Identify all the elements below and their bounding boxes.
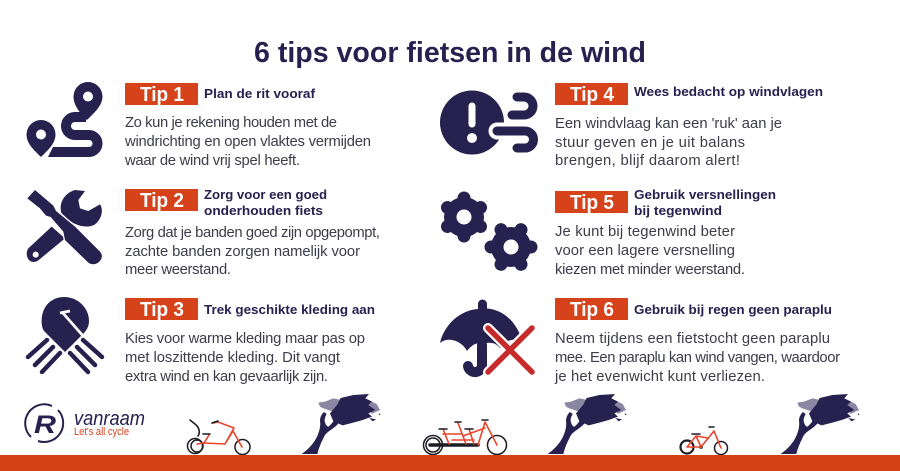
icon: wrench and screwdriver [27, 190, 102, 264]
badge: Tip 2 [125, 189, 198, 212]
text: tip 4: brengen, blijf daarom alert! [555, 153, 740, 169]
panel: tip 1 [26, 82, 371, 169]
panel: tip 3 [28, 297, 375, 385]
badge: Tip 2: Tip 2 [140, 190, 184, 212]
icon: warning and wind [440, 90, 533, 154]
illustration: windblown tree 2 [548, 394, 627, 454]
panel: tip 2 [27, 187, 380, 278]
text: tip 1: windrichting en open vlaktes vermijden [124, 134, 371, 150]
logo: van Raam: R [34, 411, 56, 439]
heading: tip 2 [204, 187, 327, 218]
heading: tip 2: onderhouden fiets [204, 203, 323, 218]
text: tip 1 [124, 115, 371, 169]
badge: Tip 3: Tip 3 [140, 299, 184, 321]
heading: tip 1: Plan de rit vooraf [204, 86, 316, 101]
text: tip 3: extra wind en kan gevaarlijk zijn. [125, 369, 328, 385]
icon: gears [444, 197, 531, 267]
text: tip 3 [125, 331, 365, 385]
icon: route with map pins [26, 82, 102, 157]
heading: tip 3: Trek geschikte kleding aan [204, 302, 375, 317]
logo: van Raam [25, 404, 145, 442]
logo: van Raam: Let's all cycle [74, 426, 129, 438]
heading: tip 5 [634, 187, 776, 218]
text: tip 6: mee. Een paraplu kan wind vangen, waardoor [555, 350, 840, 366]
title: 6 tips voor fietsen in de wind [254, 37, 646, 69]
badge: Tip 5: Tip 5 [570, 192, 614, 214]
badge: Tip 6 [555, 298, 628, 321]
badge: Tip 4 [555, 83, 628, 106]
text: tip 6 [554, 331, 840, 385]
icon: umbrella crossed out [440, 300, 532, 372]
text: tip 6: Neem tijdens een fietstocht geen paraplu [555, 331, 830, 347]
text: tip 4: stuur geven en je uit balans [555, 135, 745, 151]
text: tip 5: kiezen met minder weerstand. [555, 262, 745, 278]
ground bar [0, 455, 900, 471]
logo: van Raam: vanraam [74, 408, 145, 430]
heading: tip 5: Gebruik versnellingen [634, 187, 776, 202]
text: tip 1: waar de wind vrij spel heeft. [124, 153, 300, 169]
illustration: windblown tree 3 [781, 394, 860, 454]
heading: tip 2: Zorg voor een goed [204, 187, 327, 202]
illustration: recumbent trike [188, 420, 250, 454]
heading: tip 5: bij tegenwind [634, 203, 722, 218]
badge: Tip 1: Tip 1 [140, 84, 184, 106]
text: tip 2: Zorg dat je banden goed zijn opgepompt, [125, 225, 380, 241]
text: tip 5 [555, 224, 745, 278]
text: tip 3: Kies voor warme kleding maar pas op [125, 331, 365, 347]
text: tip 1: Zo kun je rekening houden met de [125, 115, 337, 131]
text: tip 2: meer weerstand. [125, 262, 231, 278]
panel: tip 4 [440, 83, 823, 169]
heading: tip 6: Gebruik bij regen geen paraplu [634, 302, 832, 317]
text: tip 6: je het evenwicht kunt verliezen. [554, 369, 765, 385]
panel: tip 5 [444, 187, 776, 278]
badge: Tip 1 [125, 83, 198, 106]
illustration: windblown tree 1 [302, 394, 381, 454]
illustration: small bicycle [680, 427, 728, 454]
icon: scarf [28, 297, 102, 372]
illustration: tandem bicycle [424, 420, 506, 454]
panel: tip 6 [440, 298, 840, 385]
badge: Tip 5 [555, 191, 628, 214]
heading: tip 4: Wees bedacht op windvlagen [634, 84, 823, 99]
text: tip 3: met loszittende kleding. Dit vangt [125, 350, 340, 366]
badge: Tip 6: Tip 6 [570, 299, 614, 321]
text: tip 5: Je kunt bij tegenwind beter [555, 224, 735, 240]
text: tip 4: Een windvlaag kan een 'ruk' aan je [555, 116, 782, 132]
text: tip 2: zachte banden zorgen namelijk voor [125, 244, 360, 260]
badge: Tip 4: Tip 4 [570, 84, 615, 106]
badge: Tip 3 [125, 298, 198, 321]
text: tip 5: voor een lagere versnelling [555, 243, 735, 259]
text: tip 2 [125, 225, 380, 278]
text: tip 4 [555, 116, 782, 169]
